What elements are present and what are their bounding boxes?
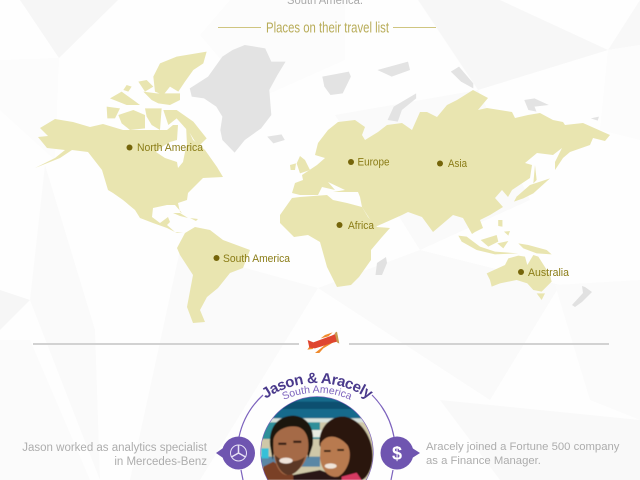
- text: Aracely's job: as a Finance Manager.: [426, 455, 541, 467]
- man: [263, 461, 294, 480]
- Japan, Sakhalin, Taiwan: [498, 165, 550, 227]
- Australia label: Australia: [528, 267, 570, 279]
- text: Jason's job: Jason worked as analytics specialist: [22, 442, 208, 454]
- world map: [35, 45, 610, 323]
- Southeast Asia and Australia: [458, 220, 552, 300]
- icon: red airplane: [307, 332, 339, 353]
- gray islands: Greenland, Iceland, Svalbard, Arctic islands: [190, 45, 599, 153]
- North America: [35, 119, 223, 233]
- location: South America: South America: [282, 386, 352, 400]
- South America label: South America: [223, 253, 291, 265]
- text: Jason's job: in Mercedes-Benz: [114, 456, 207, 468]
- right bubble: dollar icon: $: [392, 444, 402, 464]
- Europe label: Europe: [358, 156, 390, 168]
- Africa label: Africa: [348, 220, 375, 232]
- North America label: North America: [137, 142, 204, 154]
- text: Aracely's job: Aracely joined a Fortune 500 company: [426, 441, 620, 453]
- yellow continents: [35, 52, 610, 323]
- names on arc: [262, 372, 373, 400]
- UK and Ireland: [290, 156, 310, 173]
- Africa label: [336, 220, 375, 232]
- Cuba and Hispaniola: [173, 213, 188, 218]
- section divider: [33, 343, 609, 345]
- Eurasia: [292, 90, 610, 234]
- heading: places on their travel list: Places on their travel list: [266, 20, 390, 36]
- Asia label: Asia: [448, 158, 468, 170]
- circle ring: [239, 395, 394, 480]
- photo of couple: [260, 395, 375, 480]
- map labels: [126, 142, 570, 279]
- Africa: [280, 195, 390, 287]
- gray islands: Madagascar and New Zealand: [376, 257, 592, 307]
- Arctic Canada: [107, 52, 207, 147]
- Asia label: [437, 158, 468, 170]
- name: Jason & Aracely: Jason & Aracely: [262, 372, 373, 399]
- left bubble: Mercedes icon: [216, 436, 255, 470]
- woman: [319, 417, 373, 480]
- South America: [177, 227, 250, 323]
- right bubble: dollar icon: [380, 436, 420, 470]
